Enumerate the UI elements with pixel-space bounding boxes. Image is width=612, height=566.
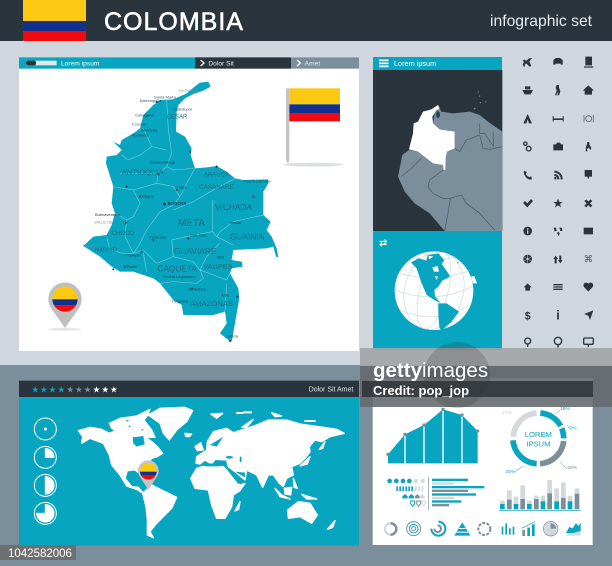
icon: pyramid <box>454 522 470 536</box>
donut chart: 25% <box>505 469 516 475</box>
country map: Colombia: VAUPES <box>203 262 233 271</box>
donut chart: 17% <box>502 410 512 416</box>
country map: Colombia: Pasto <box>127 264 138 269</box>
country map: Colombia: NARINO <box>95 248 118 254</box>
country map: Colombia: VICHADA <box>215 202 252 212</box>
watermark: getty images: gettyimages <box>373 359 488 382</box>
world map: Americas <box>78 407 193 538</box>
icon: ship <box>522 86 533 94</box>
country map: Colombia: CESAR <box>167 114 188 120</box>
rating bar: ★ <box>101 385 109 395</box>
pictogram rows <box>387 479 425 506</box>
icon: camera <box>553 143 563 150</box>
icon: car <box>553 58 563 65</box>
small chart icons <box>385 521 581 536</box>
header flag <box>23 0 86 41</box>
rating bar: ★ <box>84 385 92 395</box>
tab bar: Lorem ipsum <box>61 60 100 67</box>
country map: Colombia: Puerto Leguizamo <box>163 274 196 279</box>
country map: Colombia: GUAVIARE <box>174 246 217 256</box>
rating bar: ★ <box>40 385 48 395</box>
rating bar: ★ <box>49 385 57 395</box>
donut chart: 18% <box>560 406 571 412</box>
icon: train <box>584 57 593 68</box>
rating bar <box>19 381 359 397</box>
icon: walker <box>555 85 560 95</box>
country map: Colombia: Cartagena <box>135 113 154 118</box>
icon: up down arrows <box>553 256 563 263</box>
tab bar: Amet <box>305 60 320 67</box>
icon: arc ring <box>431 522 445 536</box>
panel: locator header: Lorem ipsum <box>394 59 436 68</box>
icon: small bars <box>502 523 514 535</box>
country map: Colombia: Mitu <box>217 255 224 260</box>
country map: Colombia: Florencia <box>149 235 167 240</box>
icon: rss <box>554 171 563 179</box>
panel: locator header <box>373 57 502 70</box>
icon: dollar: $ <box>525 310 531 322</box>
icon grid lower <box>523 199 593 348</box>
donut chart: 25% <box>567 465 578 471</box>
tab bar: Dolor Sit <box>208 60 234 67</box>
country map: Colombia: Inirida <box>230 220 242 225</box>
icon: deer <box>586 142 591 151</box>
icon: bed <box>553 116 564 122</box>
clock 4 <box>34 502 56 524</box>
icon: area mountains <box>566 523 581 536</box>
icon: speech bubble <box>584 338 593 347</box>
country map: Colombia: Ibague <box>142 193 155 198</box>
rating bar: ★ <box>57 385 65 395</box>
stacked column chart <box>499 480 581 511</box>
country map: Colombia: Tarapaca <box>172 298 189 303</box>
country map: Colombia: Santa Marta <box>154 95 176 100</box>
rating bar: ★ <box>66 385 74 395</box>
clock 1 <box>34 418 56 440</box>
country map: Colombia: Valledupar <box>173 107 193 112</box>
panel: world map <box>19 381 359 546</box>
country map: Colombia: San Jose <box>190 233 207 238</box>
country map: Colombia: Mitu <box>222 293 229 298</box>
icon: phone <box>524 171 532 180</box>
globe <box>395 245 477 336</box>
icon: command: ⌘ <box>584 254 593 265</box>
donut chart: IPSUM <box>526 440 550 449</box>
country map: Colombia: VALLE DEL <box>94 220 116 225</box>
country map: Colombia: META <box>178 218 205 229</box>
country map: Colombia: La Guajira <box>179 88 198 93</box>
icon: world <box>554 227 562 236</box>
map pin with flag <box>48 282 82 331</box>
country map: Colombia: ARAUCA <box>204 172 229 178</box>
icon: growth bars <box>522 522 535 536</box>
icon: concentric target <box>407 522 421 536</box>
rating bar: ★ <box>75 385 83 395</box>
country map: Colombia: Bucaramanga <box>150 160 176 165</box>
donut chart: LOREM <box>525 430 552 439</box>
clock icons <box>34 418 56 524</box>
country map: Colombia: BOGOTA <box>168 201 187 206</box>
area chart <box>386 408 479 464</box>
clock 3 <box>34 474 56 496</box>
country map: Colombia: Buenaventura <box>95 212 121 217</box>
icon: star <box>553 199 563 207</box>
inland seas <box>200 437 245 484</box>
clock 2 <box>34 446 56 468</box>
icon: home <box>583 85 594 95</box>
icon: plane <box>523 58 532 67</box>
country map: Colombia: Puerto Carreno <box>243 178 271 183</box>
icon: swap arrows: ⇄ <box>379 238 387 249</box>
country map: Colombia: Tunja <box>177 184 187 189</box>
title: COLOMBIA <box>104 8 244 36</box>
country map: Colombia: Leticia <box>227 333 239 338</box>
donut chart: 7% <box>569 426 577 432</box>
icon: pie <box>543 521 558 536</box>
icon grid upper <box>522 57 594 180</box>
map pin with flag <box>138 460 159 490</box>
rating bar: ★ <box>93 385 101 395</box>
panel: charts <box>373 378 593 545</box>
tab bar <box>19 57 359 69</box>
image id label: 1042582006 <box>8 548 72 560</box>
country map: Colombia: CHOCO <box>112 231 134 237</box>
icon: mail <box>584 228 593 234</box>
country map: Colombia: Monteria <box>142 128 158 133</box>
icon: info <box>523 227 532 235</box>
icon: close <box>584 199 592 207</box>
country map: Colombia: Apartado <box>132 133 149 138</box>
country map: Colombia: ANTIOQUIA <box>122 167 165 176</box>
country map: Colombia: Tumaco <box>82 243 97 248</box>
icon: check <box>523 199 533 207</box>
image id label <box>0 545 76 560</box>
globe panel <box>373 231 502 350</box>
country map: Colombia: Popayan <box>125 253 141 258</box>
icon: ring <box>385 523 396 535</box>
country map: Colombia: GUAINIA <box>230 231 265 241</box>
country map: Colombia: AMAZONAS <box>190 299 233 308</box>
icon: gears <box>524 142 531 151</box>
header bar <box>0 0 612 41</box>
country map: Colombia: Barranquilla <box>140 98 162 103</box>
country map: Colombia: CAQUETA <box>157 264 197 274</box>
icon: send <box>584 310 593 320</box>
horizontal bar chart <box>428 477 484 510</box>
subtitle: infographic set <box>490 13 593 30</box>
icon: tent <box>523 114 532 123</box>
hudson bay and gulf <box>125 420 145 477</box>
rating bar: ★ <box>110 385 118 395</box>
watermark: getty images <box>360 342 612 408</box>
icon: restaurant <box>584 115 593 122</box>
country map: Colombia: CASANARE <box>199 184 234 191</box>
panel: Colombia map <box>19 57 359 351</box>
icon: menu lines <box>553 284 563 290</box>
icon: radiation <box>523 255 532 263</box>
icon: speech marker <box>585 170 592 179</box>
donut chart <box>502 406 578 475</box>
locator map <box>373 70 502 231</box>
country map: Colombia: Corozal <box>132 122 146 127</box>
icon: pin a <box>525 338 531 347</box>
icon: info i: i <box>556 309 560 323</box>
country map: Colombia <box>82 82 278 342</box>
world map: Eurasia, Africa and Oceania <box>191 412 344 529</box>
rating bar: ★ <box>31 385 39 395</box>
country map: Colombia: La Pedrera <box>187 287 207 292</box>
icon: heart <box>583 283 593 292</box>
icon: pin b <box>554 337 562 348</box>
watermark: getty images: Credit: pop_jop <box>373 383 469 398</box>
flag on pole <box>283 88 343 167</box>
icon: up arrow <box>524 283 532 291</box>
rating bar: Dolor Sit Amet <box>309 386 353 393</box>
icon: dashed ring <box>478 523 490 535</box>
